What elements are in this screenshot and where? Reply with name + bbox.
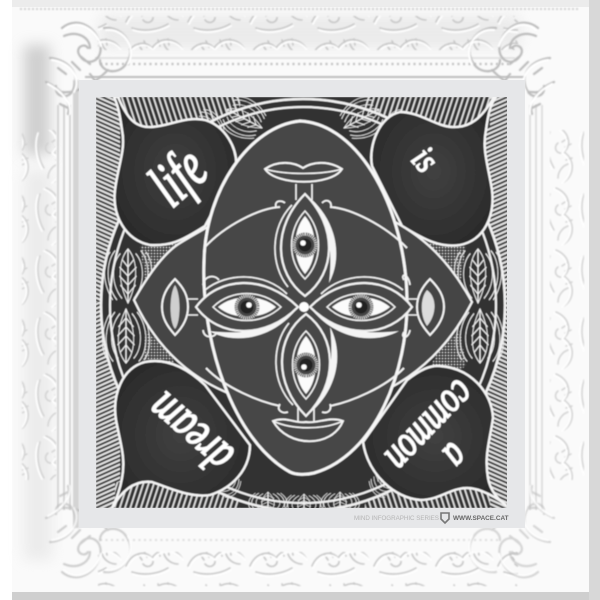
- left frame ornament: [22, 80, 79, 528]
- bottom-right heart: [363, 366, 507, 506]
- top-left heart: [114, 97, 236, 245]
- label: dream: dream: [136, 382, 243, 485]
- bottom lips: [273, 408, 343, 441]
- eye: top: [275, 194, 336, 296]
- right lips: [407, 279, 444, 335]
- left lips: [162, 279, 198, 335]
- series credit: MIND INFOGRAPHIC SERIES: [354, 515, 439, 522]
- mandala ring: [101, 99, 505, 511]
- corner ray hatching: [96, 97, 508, 508]
- right frame ornament: [530, 105, 584, 510]
- series credit: WWW.SPACE.CAT: [453, 515, 509, 522]
- ear nubs: [203, 201, 410, 413]
- white mat: [79, 80, 525, 528]
- label: life: life: [136, 134, 220, 220]
- top lips: [265, 163, 342, 200]
- ring leaves: [102, 92, 504, 514]
- corner ornaments: [46, 23, 554, 577]
- label: a: a: [434, 434, 479, 479]
- artwork panel: [96, 92, 508, 514]
- label: common: common: [376, 371, 485, 482]
- bottom frame ornament: [98, 540, 518, 586]
- eye: left: [196, 277, 298, 338]
- label: is: is: [403, 139, 446, 180]
- series credit: [354, 513, 509, 523]
- horizontal lens: [132, 220, 474, 394]
- center dot: [299, 302, 309, 312]
- eye: bottom: [276, 314, 337, 416]
- eye: right: [310, 277, 412, 338]
- bottom-left heart: [112, 361, 250, 508]
- top-right heart: [371, 97, 496, 246]
- face outline: [204, 121, 407, 474]
- top frame ornament: [20, 9, 580, 77]
